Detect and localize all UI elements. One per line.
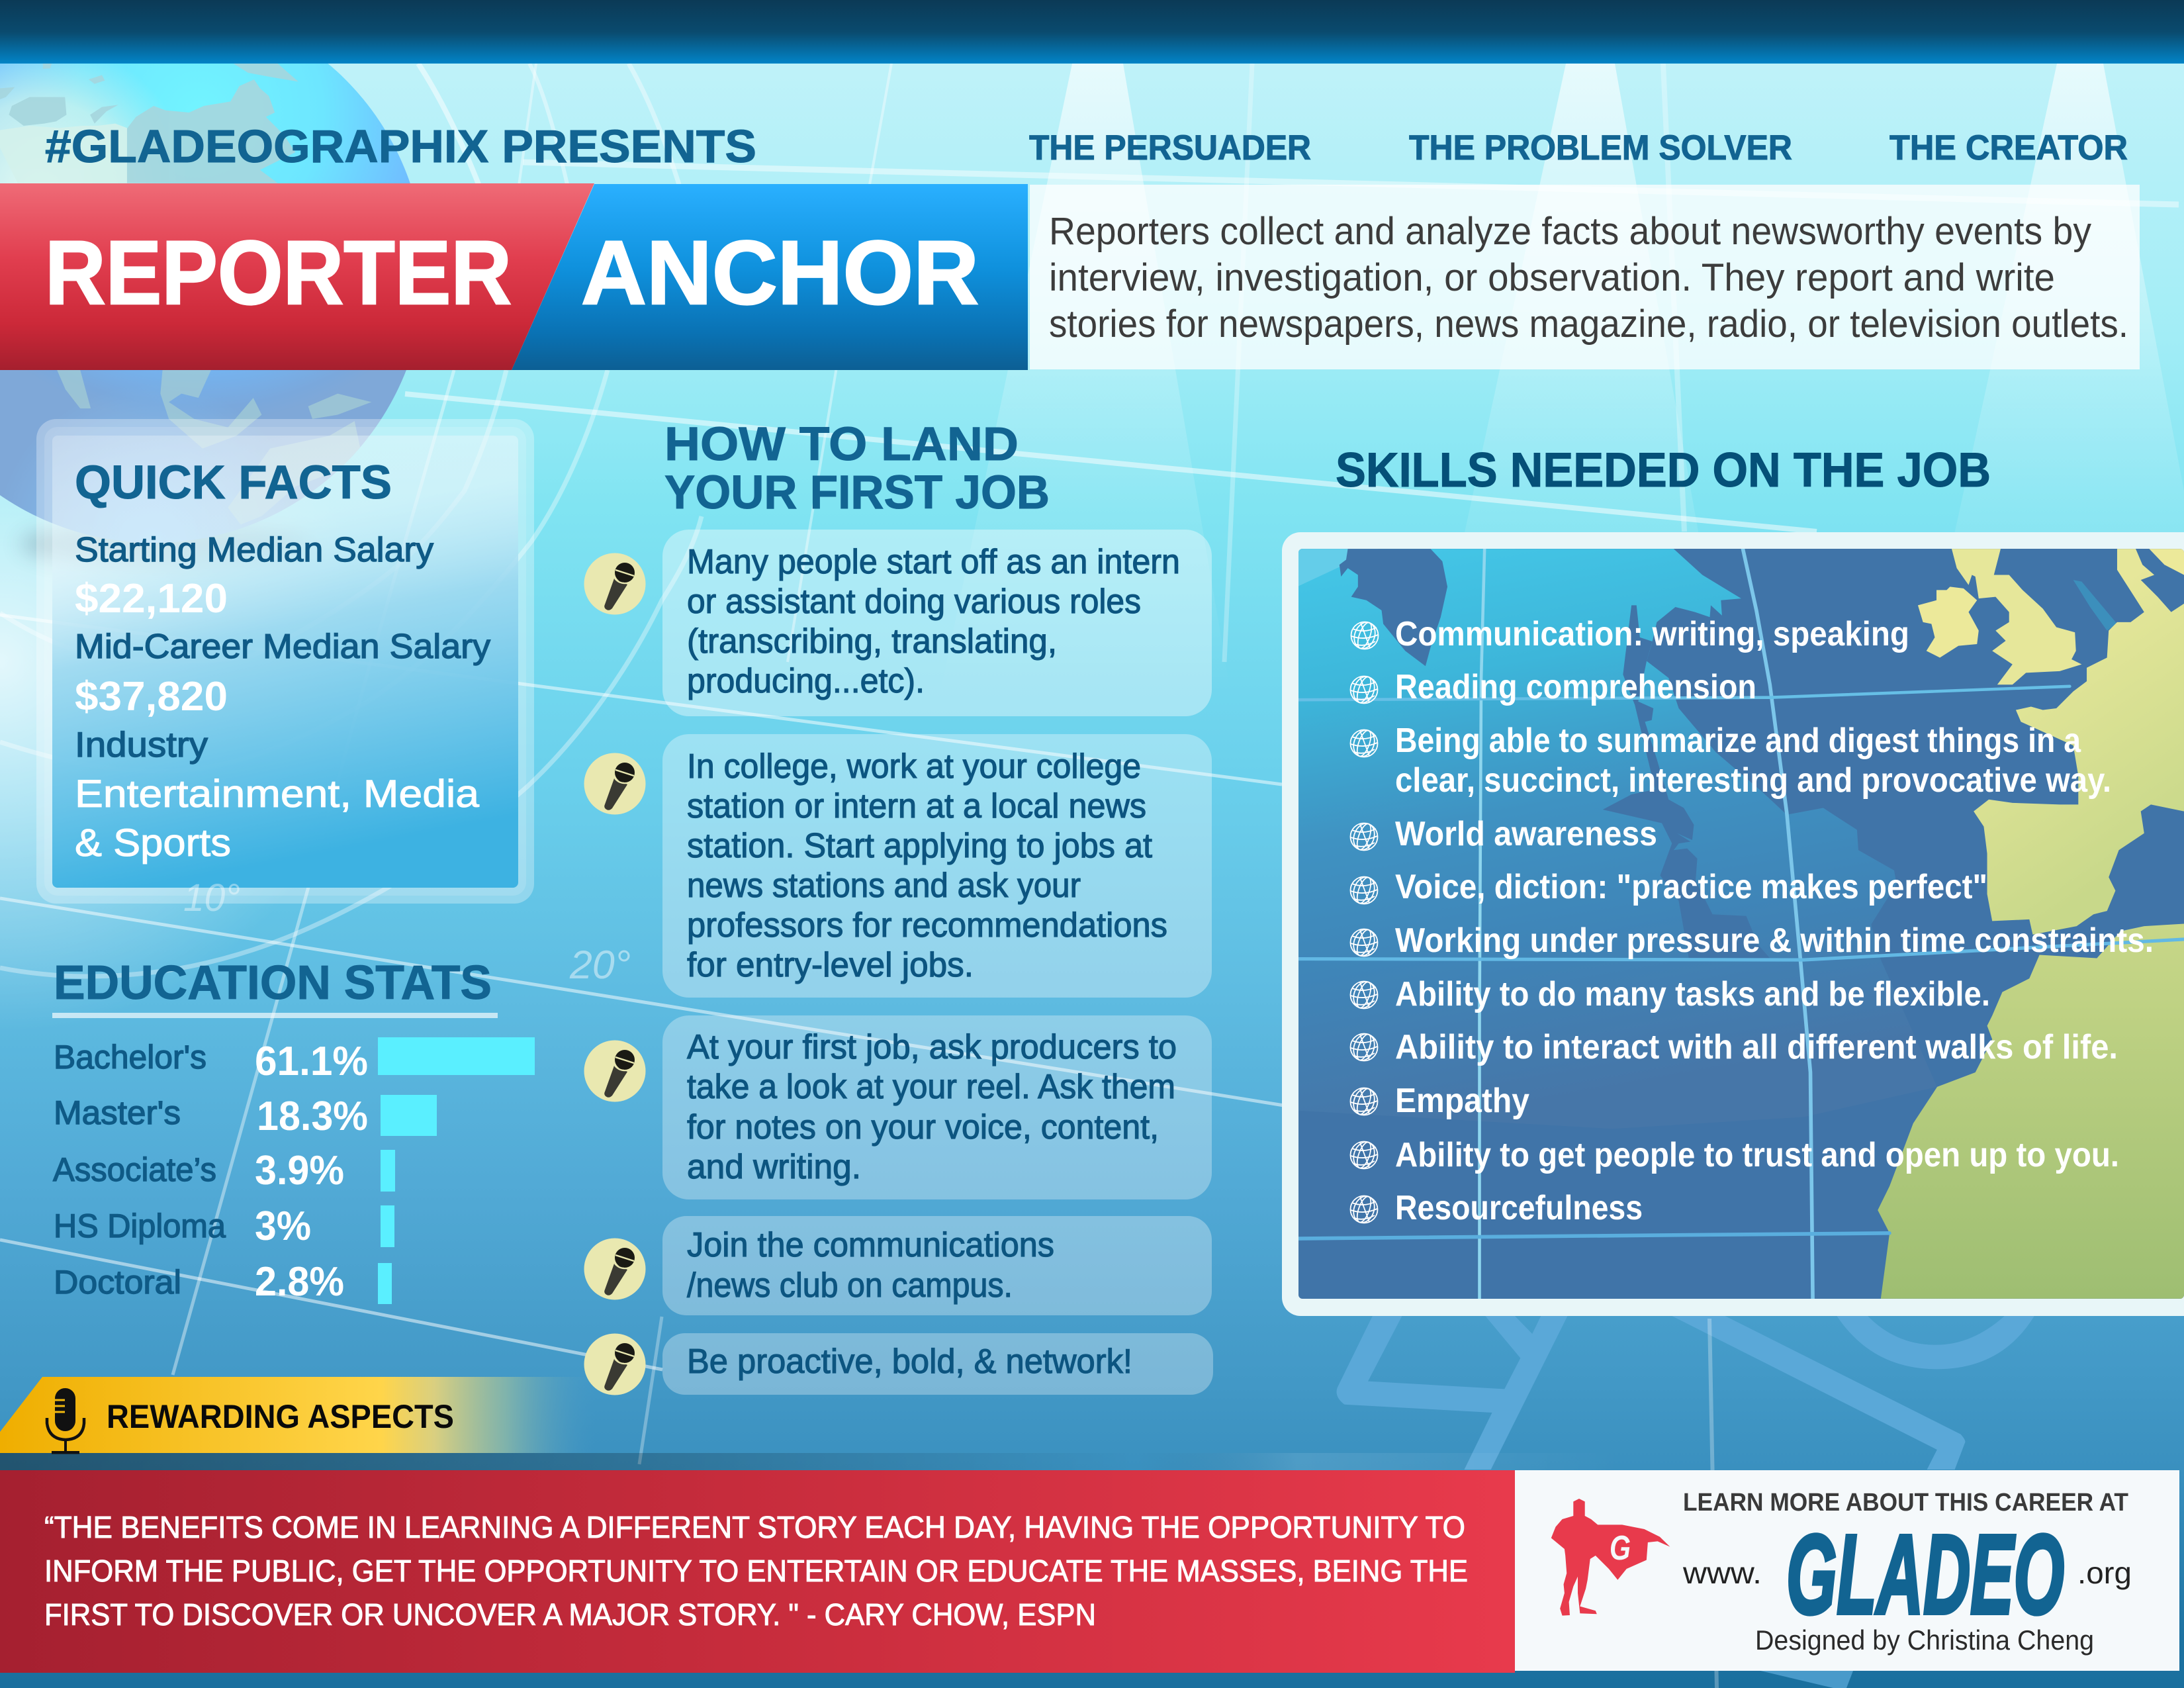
icon: microphone 1 <box>584 553 646 614</box>
title: anchor: ANCHOR <box>581 222 979 324</box>
icon: microphone 4 <box>584 1238 646 1300</box>
role tabs: THE PROBLEM SOLVER <box>1409 128 1792 167</box>
skill 3 <box>1350 722 2111 800</box>
left light glow <box>0 291 397 1033</box>
stats percentages <box>255 1039 368 1305</box>
gladeo url <box>1682 1512 2132 1638</box>
card 2: In college, work at your college <box>687 747 1141 786</box>
quote panel <box>0 1470 1515 1673</box>
rewarding aspects label: REWARDING ASPECTS <box>107 1398 454 1435</box>
stats labels: Doctoral <box>54 1264 181 1301</box>
globe shadow <box>20 524 311 564</box>
stats labels: Master's <box>54 1094 181 1131</box>
top bar <box>0 0 2184 64</box>
card 1 <box>662 530 1212 716</box>
quote panel: “THE BENEFITS COME IN LEARNING A DIFFERENT STORY EACH DAY, HAVING THE OPPORTUNITY TO <box>44 1510 1465 1544</box>
skill 8: Ability to interact with all different walks of life. <box>1395 1028 2118 1066</box>
stats labels: Bachelor's <box>54 1039 206 1076</box>
description box <box>1030 185 2140 369</box>
10 degrees label: 10° <box>183 876 240 919</box>
stats percentages: 18.3% <box>257 1094 368 1139</box>
stats labels: Associate’s <box>53 1151 216 1188</box>
icon: studio microphone <box>47 1388 84 1454</box>
quote panel: FIRST TO DISCOVER OR UNCOVER A MAJOR STORY. " - CARY CHOW, ESPN <box>44 1597 1096 1632</box>
card 1: producing...etc). <box>687 662 925 700</box>
footer logo panel <box>1515 1470 2179 1671</box>
heading: how to land your first job <box>664 418 1050 519</box>
card 2: for entry-level jobs. <box>687 946 974 984</box>
globe <box>0 64 410 543</box>
heading: how to land your first job: HOW TO LAND <box>664 418 1019 471</box>
skill 4: World awareness <box>1395 815 1657 853</box>
reporter band <box>0 183 594 370</box>
title: reporter: REPORTER <box>45 222 512 324</box>
description box: interview, investigation, or observation. They report and write <box>1049 256 2055 299</box>
skill 1: Communication: writing, speaking <box>1395 615 1909 653</box>
facts list: $37,820 <box>75 674 228 720</box>
card 2: station. Start applying to jobs at <box>687 827 1153 865</box>
facts list: Entertainment, Media <box>75 773 480 816</box>
facts list: $22,120 <box>75 576 228 622</box>
heading: quick facts: QUICK FACTS <box>75 457 392 509</box>
icon: microphone 2 <box>584 753 646 814</box>
facts list: & Sports <box>75 821 231 865</box>
stats labels <box>53 1039 226 1301</box>
panel: education stats <box>52 957 535 1305</box>
heading: how to land your first job: YOUR FIRST JOB <box>664 467 1050 519</box>
skill 5: Voice, diction: "practice makes perfect" <box>1395 868 1987 906</box>
card 2: news stations and ask your <box>687 867 1081 905</box>
stats percentages: 61.1% <box>255 1039 368 1084</box>
facts list: Starting Median Salary <box>75 531 433 569</box>
anchor band <box>512 184 1028 370</box>
stats percentages: 3% <box>255 1203 311 1249</box>
map <box>1297 549 2184 1299</box>
skill 9: Empathy <box>1395 1082 1529 1120</box>
stats percentages: 3.9% <box>255 1148 344 1194</box>
description box: Reporters collect and analyze facts about newsworthy events by <box>1049 210 2091 253</box>
skill 11: Resourcefulness <box>1395 1189 1643 1227</box>
card 2: professors for recommendations <box>687 906 1167 945</box>
facts list <box>75 531 490 865</box>
card 1: Many people start off as an intern <box>687 543 1180 581</box>
skill 3: clear, succinct, interesting and provocative way. <box>1395 761 2111 800</box>
stats labels: HS Diploma <box>54 1207 226 1244</box>
icon: microphone 3 <box>584 1041 646 1102</box>
facts list: Industry <box>75 726 208 765</box>
title banner <box>0 183 1028 370</box>
quote panel: INFORM THE PUBLIC, GET THE OPPORTUNITY TO ENTERTAIN OR EDUCATE THE MASSES, BEING THE <box>44 1554 1468 1588</box>
gladeo url: www. <box>1682 1556 1762 1590</box>
designer credit: Designed by Christina Cheng <box>1755 1624 2094 1656</box>
icon: superhero silhouette: G <box>1610 1529 1631 1568</box>
role tabs: THE CREATOR <box>1889 128 2128 167</box>
heading: skills needed on the job: SKILLS NEEDED ON THE JOB <box>1336 444 1991 497</box>
card 4: /news club on campus. <box>687 1266 1013 1305</box>
card 1: (transcribing, translating, <box>687 622 1057 661</box>
bar chart <box>378 1037 535 1304</box>
stats percentages: 2.8% <box>255 1259 344 1305</box>
spotlights <box>940 64 2184 695</box>
skill 3: Being able to summarize and digest things in a <box>1395 722 2081 760</box>
icon: microphone 5 <box>584 1333 646 1395</box>
card 1: or assistant doing various roles <box>687 583 1141 621</box>
card 3 <box>662 1015 1212 1199</box>
card 3: take a look at your reel. Ask them <box>687 1068 1175 1106</box>
role tabs: THE PERSUADER <box>1029 128 1311 167</box>
skill 2: Reading comprehension <box>1395 668 1756 706</box>
learn more text: LEARN MORE ABOUT THIS CAREER AT <box>1683 1489 2128 1517</box>
card 4: Join the communications <box>687 1226 1054 1264</box>
panel: skills map <box>1282 532 2184 1316</box>
20 degrees label: 20° <box>569 943 631 987</box>
skill 10: Ability to get people to trust and open up to you. <box>1395 1136 2119 1174</box>
card 2: station or intern at a local news <box>687 787 1146 825</box>
card 3: and writing. <box>687 1148 861 1186</box>
heading: education stats: EDUCATION STATS <box>54 957 492 1009</box>
card 3: for notes on your voice, content, <box>687 1108 1159 1147</box>
skills list <box>1350 615 2154 1227</box>
role tabs <box>1029 128 2128 167</box>
card 3: At your first job, ask producers to <box>687 1028 1177 1066</box>
facts list: Mid-Career Median Salary <box>75 628 490 666</box>
card 2 <box>662 734 1212 998</box>
panel: quick facts <box>36 419 534 904</box>
rewarding aspects banner <box>0 1377 1621 1471</box>
description box: stories for newspapers, news magazine, radio, or television outlets. <box>1049 303 2128 346</box>
skill 7: Ability to do many tasks and be flexible. <box>1395 975 1990 1013</box>
studio floor shapes <box>1337 1315 2034 1688</box>
gladeo url: .org <box>2077 1556 2132 1590</box>
card 5 <box>662 1333 1213 1395</box>
card 5: Be proactive, bold, & network! <box>687 1342 1132 1381</box>
card 4 <box>662 1216 1212 1315</box>
icon: superhero silhouette <box>1551 1499 1670 1616</box>
presents heading: #GLADEOGRAPHIX PRESENTS <box>45 120 756 172</box>
